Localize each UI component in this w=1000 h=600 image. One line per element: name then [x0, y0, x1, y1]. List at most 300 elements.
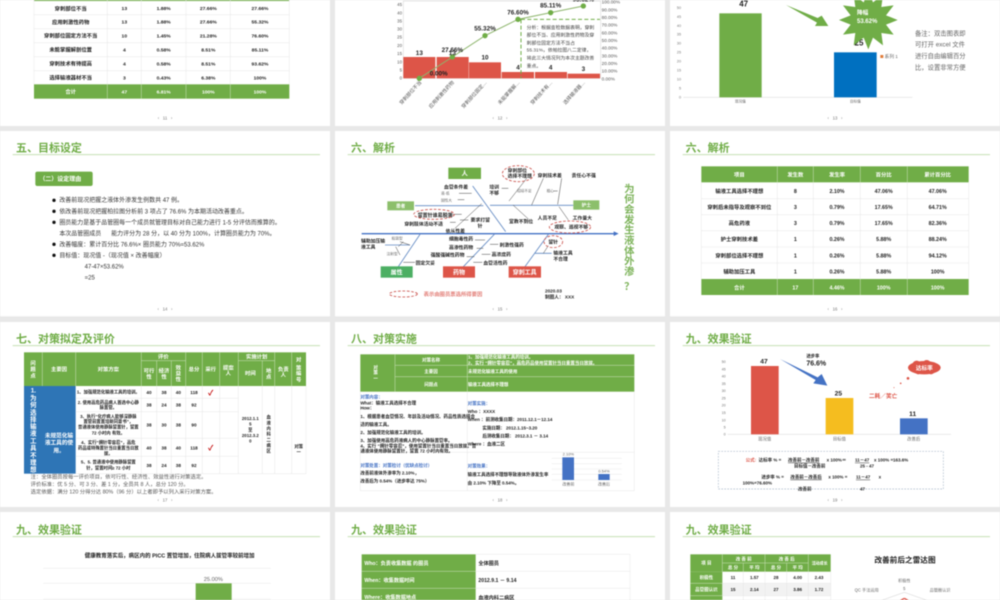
check content — [360, 462, 549, 486]
table: 28 — [773, 575, 779, 580]
analysis note — [527, 24, 594, 69]
radar chart: QC 手法运用 — [855, 586, 879, 592]
implementation content: 对策实施： — [468, 400, 490, 407]
pareto chart: 55.32% — [474, 26, 496, 33]
analysis note: 部位不当、应用刺激性药物及穿 — [527, 32, 594, 39]
table: 5.88% — [876, 253, 891, 259]
chart title: 健康教育落实后，病区内的 PICC 置管增加，住院病人拔管率较前增加 — [85, 552, 255, 560]
table: causes frequency: 100% — [202, 90, 215, 96]
formula box: x 100% = — [828, 475, 848, 480]
implementation content: Who ：XXXX — [468, 409, 495, 414]
table: 提案 — [223, 363, 234, 371]
slide 15: fishbone diagram — [335, 131, 665, 316]
table: causes frequency: 穿刺部位不当 — [55, 4, 87, 12]
pareto chart: 40.00% — [602, 46, 617, 51]
table: 38 — [146, 403, 152, 408]
countermeasure content: 2、加强规范化输液工具的培训。 — [360, 429, 426, 436]
radar chart — [855, 555, 950, 600]
cause labels: 液工具 — [361, 244, 376, 251]
cloud callout: 达标率 — [916, 364, 933, 372]
formula box: 100%=76.60% — [743, 480, 772, 485]
pareto chart: 85.11% — [540, 3, 562, 10]
table: 穿刺后未指导及观察不到位 — [707, 203, 772, 211]
table: 47.06% — [929, 189, 947, 195]
table: 2.14 — [750, 587, 759, 592]
progress rate label: 进步率 — [806, 353, 820, 360]
check content: 输液工具选择不理想导致液体外渗发生率 — [468, 471, 549, 478]
table: 性 — [176, 375, 182, 383]
note: 比，设置非常方便 — [915, 62, 966, 71]
table: causes frequency: 穿刺部位固定方法不当 — [44, 32, 97, 40]
pareto chart: 90.00% — [602, 7, 617, 12]
cause labels: 工作量大 — [573, 214, 592, 221]
category boxes: 穿刺工具 — [513, 268, 537, 276]
formula box: x 100%＝ — [827, 458, 846, 463]
pareto chart: 40 — [397, 10, 403, 15]
table: causes frequency: 13 — [122, 6, 127, 12]
table: causes frequency: 4 — [123, 48, 126, 54]
table: 累计百分比 — [924, 171, 952, 179]
table: 品管圈认识 — [695, 586, 718, 593]
pareto chart: 15 — [397, 51, 403, 56]
bullet list: 圈员能力是基于品管圈每一个成员就管理目标对自己能力进行 1-5 分评估而推算的。 — [59, 218, 281, 226]
table: 内 — [266, 425, 271, 432]
pareto chart: 27.66% — [442, 47, 463, 54]
arrow — [786, 5, 828, 26]
bar chart: 47 — [760, 359, 768, 366]
countermeasure content: 4、实行 “拥针零容忍”，使用留置针当日重置当日放拔。普 — [360, 442, 477, 449]
bar chart: baseline vs target: 现况值 — [735, 99, 746, 104]
cause labels: 刺激性强药 — [500, 241, 524, 248]
table: 工 — [30, 438, 37, 445]
pareto chart: 10 — [481, 55, 489, 62]
table: 92 — [191, 463, 197, 468]
header table: 策 — [373, 369, 378, 376]
bar chart: baseline vs target: 25 — [855, 38, 864, 47]
header table: 问题点 — [424, 381, 438, 388]
pareto chart: 穿刺技术有… — [529, 79, 554, 106]
table: causes frequency: 1.45% — [157, 34, 171, 40]
table: 0.79% — [829, 205, 845, 211]
pareto chart: 20.00% — [602, 61, 617, 66]
pareto chart: 4 — [516, 65, 520, 72]
table: 90 — [191, 423, 197, 428]
starburst callout — [839, 0, 898, 49]
table: 改 善 前 — [736, 555, 752, 562]
table: causes frequency: 6.81% — [157, 90, 171, 96]
table: 全体圈员 — [478, 559, 499, 567]
table: 百分比 — [876, 171, 892, 179]
table: 38 — [161, 445, 167, 450]
table — [362, 554, 630, 600]
table: 118 — [190, 390, 198, 395]
table: causes frequency: 0.43% — [157, 76, 171, 82]
table: 72 小时内 有效。 — [92, 429, 125, 436]
table: 4、实行“拥针零容忍”，高危 — [81, 439, 136, 446]
radar chart: 积极性 — [898, 577, 911, 583]
minor labels: 粘袋型 — [392, 235, 403, 240]
table: causes frequency: 8.51% — [201, 48, 216, 54]
table: causes frequency: 27.66% — [200, 20, 217, 26]
table: 号 — [296, 377, 302, 384]
table: 实施计划 — [246, 353, 267, 361]
table: 2012.9.1 － 9.14 — [478, 578, 517, 584]
pareto chart: 35 — [397, 18, 403, 23]
pareto chart: 5 — [400, 67, 403, 72]
cause labels: 强酸强碱性药物 — [431, 252, 465, 259]
table: 2.10% — [829, 189, 845, 195]
progress rate label: 76.6% — [806, 361, 827, 368]
table: 40 — [146, 445, 152, 450]
table: 评价 — [158, 353, 169, 361]
table: 药品或特殊置针当日重置当日放 — [78, 444, 139, 451]
heading: 九、效果验证 — [351, 522, 417, 536]
table: 理 — [30, 458, 37, 466]
garbled red label: 二耗／笑亡 — [869, 392, 898, 400]
vertical question: 发 — [624, 213, 635, 226]
cause labels: 观察、巡视不够 — [554, 224, 588, 231]
table: 何 — [30, 400, 37, 409]
category boxes: 属性 — [391, 268, 403, 276]
vertical question: 渗 — [624, 265, 635, 278]
bullet list: =25 — [85, 276, 95, 282]
table: 27 — [773, 587, 779, 592]
table: 100% — [931, 269, 945, 275]
table: 置管前置置培新同意书”， — [83, 418, 133, 425]
content frame — [360, 392, 634, 491]
table: 积极性 — [700, 574, 714, 581]
implementation content — [468, 400, 553, 447]
bar chart: baseline vs target: 35 — [677, 33, 681, 37]
radar chart: 品管圈认识 — [930, 586, 950, 592]
table: 1 — [794, 237, 797, 243]
table: causes frequency: 13 — [122, 20, 127, 26]
table: 0.26% — [829, 269, 845, 275]
check content: 对策效果： — [468, 462, 490, 469]
pareto chart: 20 — [397, 43, 403, 48]
table: causes frequency: 合计 — [65, 88, 77, 96]
formula box: 改善前－改善后 — [790, 474, 822, 481]
header table: 未规范化输液工具的使用 — [468, 368, 518, 375]
table: 94.12% — [929, 253, 947, 259]
pareto chart: 45 — [397, 2, 403, 7]
table: causes frequency: 27.66% — [200, 6, 217, 12]
countermeasure content: 3、加强使用高危药液病人的中心静脉置管率。 — [360, 437, 453, 444]
table: causes frequency: 21.28% — [200, 34, 217, 40]
implementation content: 实施日期： 2012.1.15~3.20 — [482, 424, 538, 431]
legend — [389, 290, 482, 298]
bar chart: 10 — [722, 418, 726, 422]
table: causes frequency: 应用刺激性药物 — [52, 18, 90, 26]
table: 项目 — [734, 172, 745, 179]
table: 1.57 — [750, 575, 759, 580]
table: 5 — [249, 422, 252, 427]
table: 92 — [191, 403, 197, 408]
table: 47.06% — [875, 189, 893, 195]
table: 64.71% — [929, 205, 947, 211]
table: 8 — [794, 189, 797, 195]
pareto chart: 穿刺部位不当 — [398, 79, 423, 106]
table: causes frequency: 6.38% — [201, 76, 216, 82]
pareto chart: 13 — [449, 50, 456, 57]
table: 病 — [266, 442, 271, 448]
implementation content: Where ：血液二区 — [468, 440, 506, 447]
table: 合计 — [734, 283, 745, 291]
formula box: 11－47 — [856, 475, 871, 480]
pareto chart: 13 — [416, 50, 423, 57]
table: 护士穿刺技术差 — [721, 235, 759, 243]
table: 具 — [30, 444, 37, 452]
table: causes frequency: 穿刺技术有待提高 — [49, 60, 93, 68]
vertical question: 何 — [624, 193, 635, 206]
cause labels: 细胞毒性药 — [449, 235, 473, 242]
table: 100% — [931, 285, 945, 291]
page number 13: ‹ 13 › — [828, 115, 843, 120]
bar chart: 45 — [722, 367, 726, 371]
bar chart: baseline vs target: 45 — [677, 15, 681, 19]
check content: 对策处置：对策检讨（优缺点检讨） — [360, 462, 432, 469]
vertical question — [624, 182, 635, 293]
cause labels: 要求打留 — [471, 217, 490, 224]
slide 12: pareto chart — [335, 0, 665, 126]
bar chart — [722, 359, 951, 443]
table: causes frequency: 27.66% — [252, 6, 269, 12]
bar chart: baseline vs target: 50 — [677, 6, 681, 10]
check content: 由 2.10% 下降至 0.54%。 — [468, 479, 519, 486]
page number 12: ‹ 12 › — [493, 115, 508, 120]
check content: 改善前液体外渗率为 2.10%， — [360, 469, 419, 476]
table: 5、5. 普通液中使用静脉留置 — [81, 459, 136, 466]
table: 液工具的使 — [45, 439, 73, 447]
table: 17.65% — [875, 221, 893, 227]
slide 19: effect verification chart — [670, 322, 1000, 507]
table: 二 — [266, 437, 271, 442]
pareto chart: 76.60% — [507, 9, 529, 16]
table: 人 — [281, 372, 287, 379]
starburst callout: 53.62% — [857, 19, 878, 25]
table: When：收集数据时间 — [364, 576, 414, 584]
bar chart: 25 — [835, 391, 842, 398]
heading: 六、解析 — [351, 140, 395, 154]
cause labels: 高浓度药 — [492, 251, 511, 258]
minor labels: 招培不足 — [517, 188, 532, 193]
note — [915, 28, 966, 71]
formula box: x 100% =163.6% — [874, 458, 908, 463]
heading: 六、解析 — [686, 140, 730, 154]
pareto chart: 30.00% — [602, 53, 617, 58]
slide 14: target setting — [0, 131, 330, 316]
table: 11 — [731, 575, 736, 580]
table: causes frequency: 10 — [122, 34, 127, 40]
minor labels: 注射型 — [387, 251, 398, 256]
table: 总 分 — [771, 564, 782, 571]
table: causes frequency: 93.62% — [252, 62, 269, 68]
table: causes frequency: 3 — [123, 76, 126, 82]
bullet list: 本次品管圈成员 能力评分为 28 分，以 40 分为 100%，计算圈员能力为 70%。 — [59, 229, 275, 237]
table: 辅助加压工具 — [723, 267, 756, 275]
category boxes: 患者 — [396, 203, 406, 210]
check content: 改善后为 0.54%（进步率达 75%） — [360, 477, 429, 484]
bar chart: 30 — [722, 389, 726, 393]
table: 2012.1.1 — [242, 416, 259, 421]
table: 负责 — [278, 365, 289, 373]
minor labels: 粗心 — [547, 188, 554, 193]
table: ✓ — [208, 443, 214, 452]
implementation content: 后测收集日期： 2012.3.1 － 3.14 — [482, 432, 549, 439]
table: 人 — [226, 370, 232, 377]
table: causes frequency: 47 — [122, 90, 127, 96]
pareto chart: 0.00% — [430, 70, 448, 77]
table: 40 — [146, 390, 152, 395]
pareto chart: 3 — [582, 66, 586, 73]
table: 地 — [266, 367, 272, 375]
analysis note: 分析：根据查检数据表明，穿刺 — [527, 24, 594, 31]
slide 13: target bar chart — [670, 0, 1000, 126]
table: 24 — [161, 463, 167, 468]
progress rate arrow — [780, 359, 827, 386]
table: causes frequency: 100% — [254, 76, 267, 82]
table: 高危药液 — [729, 219, 751, 227]
bullet list: 改善前现况把握之液体外渗发生例数共 47 例。 — [59, 196, 183, 204]
bar chart: 改善后 — [907, 436, 921, 443]
table: 效 — [176, 363, 182, 371]
cause labels: 依从性差 — [446, 227, 465, 234]
table: 主要因 — [51, 365, 67, 373]
bullet list: 改善幅度：累计百分比 76.6%× 圈员能力 70%=53.62% — [59, 240, 205, 248]
formula box: 47 — [860, 487, 865, 492]
bar chart: before and after: 改善前 — [562, 481, 574, 487]
bar chart — [43, 568, 271, 600]
table: 2012.3.2 — [242, 433, 259, 438]
table: 发生率 — [829, 171, 846, 179]
table: 38 — [161, 390, 167, 395]
bar chart: baseline vs target — [677, 0, 912, 104]
table: 1、加强规范化输液工具的培训。 — [77, 389, 140, 396]
fishbone bones — [362, 178, 619, 267]
minor labels: 液-低 — [441, 191, 450, 196]
formula box: 达标率 % = — [759, 457, 782, 464]
note: 可打开 excel 文件 — [915, 40, 966, 49]
table: 38 — [176, 463, 181, 468]
radar chart: 5 — [903, 586, 906, 591]
cause labels: 穿刺肢体活动不适 — [404, 220, 443, 227]
bar chart: 现况值 — [758, 436, 772, 443]
pareto chart: 0 — [400, 76, 403, 81]
pareto chart: 选择输液器… — [562, 79, 587, 106]
table: 0.79% — [829, 221, 845, 227]
table: 1. — [31, 388, 36, 395]
implementation content: When ：前测收集日期：2011.12.1－12.14 — [468, 416, 553, 423]
table: 30 — [161, 423, 167, 428]
pareto chart: 70.00% — [602, 23, 617, 28]
pareto chart: 10.00% — [602, 69, 617, 74]
header table: 2、实行 “拥针零容忍”，高危药品使用留置针当日重置当日放拔。 — [468, 359, 597, 366]
vertical question: 体 — [624, 244, 635, 257]
cause labels: 宣教不到位 — [509, 218, 533, 225]
pareto chart: 30 — [397, 27, 403, 32]
bar chart: before and after — [552, 452, 622, 487]
table: 40 — [176, 390, 181, 395]
vertical question: 会 — [624, 203, 635, 216]
table: 择 — [30, 414, 37, 423]
countermeasure content: How： — [360, 406, 374, 411]
heading: 九、效果验证 — [16, 522, 82, 536]
table: 至 — [248, 427, 253, 432]
analysis note: 重点。 — [527, 62, 541, 69]
badge — [35, 172, 93, 186]
table: 采行 — [205, 365, 217, 373]
pareto chart: 60.00% — [602, 30, 617, 35]
formula box: 公式: — [746, 457, 757, 463]
vertical question: 生 — [624, 224, 634, 237]
bar chart: 50 — [722, 360, 726, 364]
table: 经济 — [159, 367, 170, 375]
progress rate label — [806, 353, 827, 368]
category boxes: 药物 — [453, 268, 465, 276]
table: 液 — [30, 429, 37, 438]
table: 题 — [30, 366, 36, 373]
bullet list: 47-47×53.62% — [85, 265, 124, 271]
table: 平 均 — [749, 564, 760, 571]
bar chart: 0 — [724, 433, 726, 437]
notes: 选定依据：满分 120 分得分达 80%（96 分）以上者即予以列入采行对策方案。 — [31, 487, 217, 495]
bar chart: 5 — [724, 425, 726, 429]
cloud callout — [893, 360, 941, 388]
table: causes frequency: 76.60% — [252, 34, 269, 40]
slide 17: countermeasures table — [0, 322, 330, 507]
bar chart: 35 — [722, 382, 726, 386]
page number 17: ‹ 17 › — [158, 497, 173, 502]
table: 选 — [30, 407, 37, 416]
bar chart: baseline vs target: 5 — [679, 87, 681, 91]
category boxes: 人 — [462, 171, 469, 178]
formula box: 11－47 — [855, 458, 870, 463]
table: 118 — [190, 445, 198, 450]
table: 1.72 — [815, 587, 824, 592]
pareto chart: 4 — [549, 65, 553, 72]
table: 液 — [266, 419, 271, 426]
table: 益 — [176, 369, 182, 377]
table: 问 — [30, 359, 36, 367]
table: 想 — [30, 465, 37, 474]
table: causes frequency: 1.88% — [157, 6, 171, 12]
table: 点 — [266, 372, 272, 380]
bar chart: baseline vs target: 10 — [677, 78, 681, 82]
page number 16: ‹ 16 › — [828, 306, 843, 311]
formula box: 改善前 — [798, 486, 812, 493]
table: 17.65% — [875, 205, 893, 211]
pareto chart: 10 — [397, 59, 403, 64]
table: 穿刺部位选择不理想 — [715, 251, 764, 259]
vertical question: ？ — [624, 281, 634, 293]
bar chart: baseline vs target: 40 — [677, 24, 681, 28]
table: 未规范化输 — [45, 432, 73, 440]
table: 改 善 后 — [779, 555, 795, 562]
notes — [31, 473, 217, 495]
table: 1 — [794, 253, 797, 259]
formula box — [718, 451, 943, 493]
cause labels: 穿刺部位 — [508, 167, 527, 174]
table: causes frequency: 未能掌握解剖位置 — [49, 46, 93, 54]
formula box: 改善前－改善前 — [788, 457, 820, 464]
category boxes — [381, 168, 599, 278]
table: 输液工具选择不理想 — [715, 187, 764, 195]
table: 88.24% — [929, 237, 947, 243]
bar chart: 25 — [722, 396, 726, 400]
cause labels: 输液工具 — [553, 249, 573, 256]
cause labels — [361, 167, 596, 267]
table: ✓ — [208, 388, 214, 397]
